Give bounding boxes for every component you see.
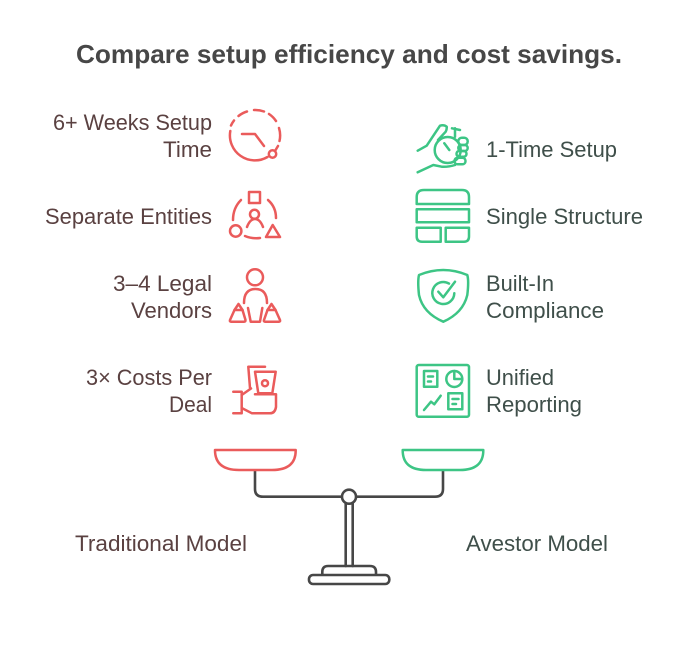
label: Built-In Compliance: Compliance [486, 298, 604, 323]
label: 3× Costs Per Deal: 3× Costs Per [86, 365, 212, 390]
label: 3–4 Legal Vendors [113, 271, 212, 323]
label: Built-In Compliance: Built-In [486, 271, 554, 296]
label: Built-In Compliance [486, 271, 604, 323]
label: 3–4 Legal Vendors: Vendors [131, 298, 212, 323]
label: 3× Costs Per Deal: Deal [169, 392, 212, 417]
label: Single Structure: Single Structure [486, 204, 643, 229]
icon: entities [230, 192, 280, 238]
label: Avestor Model: Avestor Model [466, 531, 608, 556]
label: 3× Costs Per Deal [86, 365, 212, 417]
label: 6+ Weeks Setup Time [53, 110, 212, 162]
icon: unified reporting dashboard [417, 365, 469, 417]
icon: single structure [417, 190, 469, 242]
left pan [215, 450, 296, 470]
beam and stand [255, 471, 443, 584]
icon: compliance shield [418, 270, 468, 322]
label: 1-Time Setup: 1-Time Setup [486, 137, 617, 162]
title: Compare setup efficiency and cost savings. [76, 39, 622, 69]
label: Unified Reporting [486, 365, 582, 417]
icon: costs per deal [233, 367, 276, 413]
label: Traditional Model: Traditional Model [75, 531, 247, 556]
label: 3–4 Legal Vendors: 3–4 Legal [113, 271, 212, 296]
balance scale [215, 450, 483, 584]
label: Separate Entities: Separate Entities [45, 204, 212, 229]
icon: hand with stopwatch [418, 125, 468, 172]
icon: dashed clock [230, 110, 280, 160]
label: Unified Reporting: Unified [486, 365, 554, 390]
label: 6+ Weeks Setup Time: 6+ Weeks Setup [53, 110, 212, 135]
icon: legal vendors [230, 269, 280, 322]
label: Unified Reporting: Reporting [486, 392, 582, 417]
label: 6+ Weeks Setup Time: Time [163, 137, 212, 162]
right pan [403, 450, 483, 470]
